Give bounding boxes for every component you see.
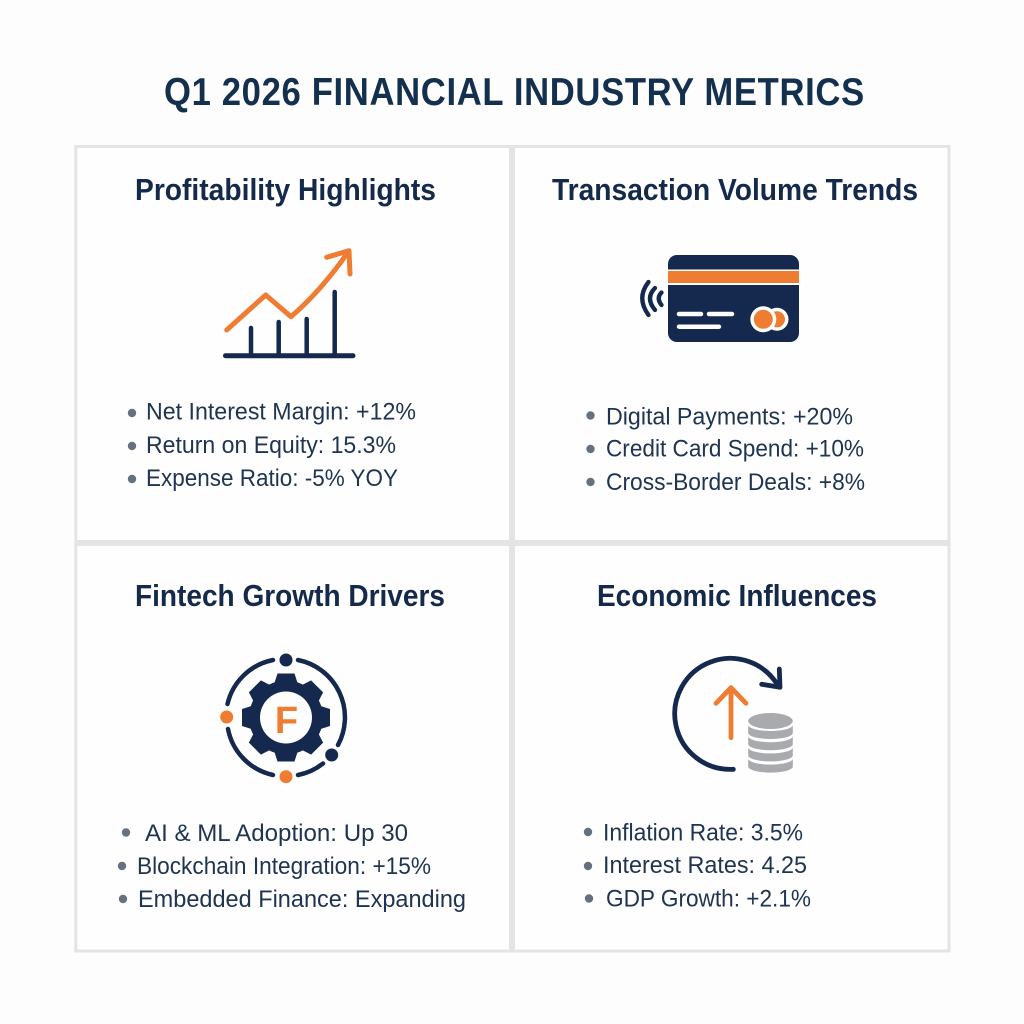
bullet list: transaction metrics: Cross-Border Deals: +8%: [606, 469, 865, 496]
bullet list: profitability metrics: Net Interest Margin: +12%: [146, 398, 416, 426]
bullet list: fintech metrics: AI & ML Adoption: Up 30: [145, 820, 408, 847]
panel: transaction volume trends: [514, 146, 949, 542]
heading: economic influences: Economic Influences: [597, 578, 877, 613]
bullet list: transaction metrics: [586, 403, 865, 496]
heading: transaction volume trends: Transaction Volume Trends: [552, 172, 918, 207]
bullet list: fintech metrics: Blockchain Integration: +15%: [137, 853, 431, 880]
panel: economic influences: [514, 544, 949, 951]
icon: cycle arrow with up arrow and coin stack: [675, 658, 793, 773]
icon: contactless credit card: [642, 255, 799, 342]
bullet list: transaction metrics: Credit Card Spend: +10%: [606, 436, 864, 463]
panel: fintech growth drivers: [76, 544, 511, 951]
bullet list: fintech metrics: [118, 820, 466, 913]
icon: rising line and bar chart: [226, 251, 353, 356]
bullet list: transaction metrics: Digital Payments: +20%: [606, 403, 853, 430]
heading: fintech growth drivers: Fintech Growth Drivers: [135, 578, 445, 613]
icon: fintech gear with orbit: [220, 654, 345, 783]
bullet list: profitability metrics: Return on Equity: 15.3%: [146, 432, 396, 459]
panel: profitability highlights: [76, 146, 511, 542]
bullet list: economic metrics: Interest Rates: 4.25: [603, 852, 807, 879]
heading: profitability highlights: Profitability Highlights: [135, 172, 436, 207]
icon: fintech gear with orbit: F: [275, 700, 298, 742]
bullet list: economic metrics: GDP Growth: +2.1%: [606, 886, 811, 913]
title: Q1 2026 FINANCIAL INDUSTRY METRICS: [164, 70, 864, 113]
bullet list: profitability metrics: [128, 398, 416, 492]
bullet list: economic metrics: [584, 820, 811, 913]
bullet list: profitability metrics: Expense Ratio: -5% YOY: [146, 465, 398, 492]
bullet list: economic metrics: Inflation Rate: 3.5%: [603, 820, 803, 847]
bullet list: fintech metrics: Embedded Finance: Expanding: [138, 886, 466, 913]
